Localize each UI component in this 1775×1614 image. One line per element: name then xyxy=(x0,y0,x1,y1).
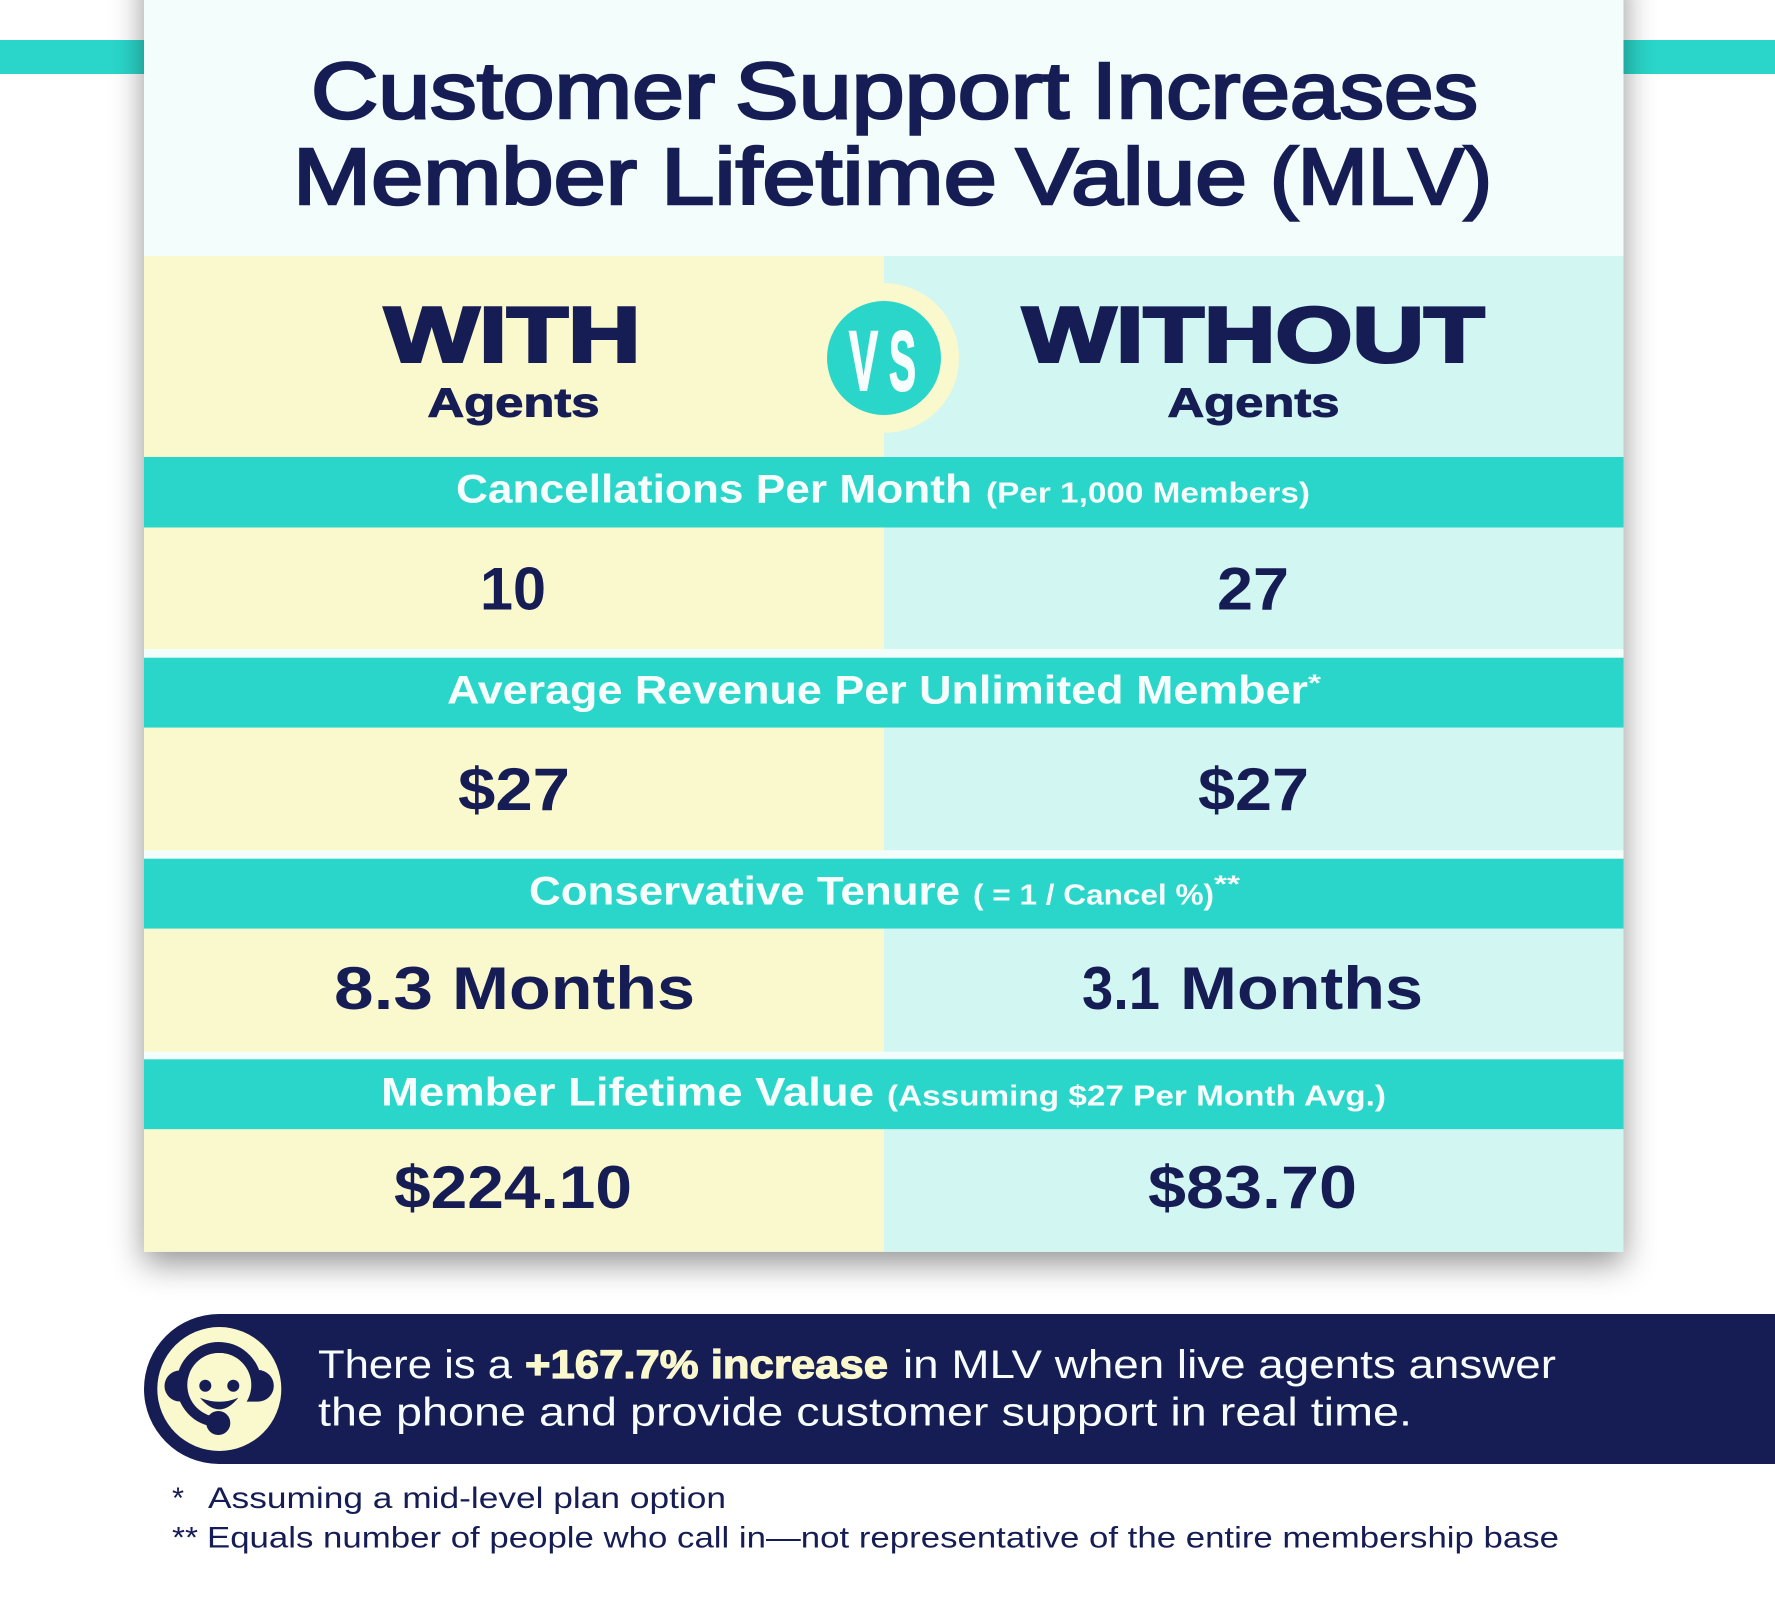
row: conservative tenure: Months xyxy=(452,955,695,1022)
footnotes: Assuming a mid-level plan option xyxy=(208,1482,726,1515)
footnotes xyxy=(172,1482,1559,1554)
footnotes: Equals number of people who call in—not representative of the entire membership base xyxy=(207,1522,1559,1554)
row: cancellations per month xyxy=(144,457,1624,649)
column heading: without agents: Agents xyxy=(1168,380,1340,426)
row: conservative tenure: ( = 1 / Cancel %) xyxy=(973,880,1214,912)
title block: Increases xyxy=(1092,46,1478,135)
title block: Member xyxy=(293,132,637,221)
row: cancellations per month: 10 xyxy=(480,556,546,622)
column heading: without agents: WITHOUT xyxy=(1022,290,1484,378)
decorative teal bar left xyxy=(0,40,150,74)
column heading: without agents xyxy=(884,256,1624,457)
VS badge: V xyxy=(849,314,878,408)
row: member lifetime value: $83.70 xyxy=(1148,1154,1357,1221)
decorative teal bar right xyxy=(1620,40,1775,74)
callout banner xyxy=(144,1314,1775,1464)
column heading: with agents: WITH xyxy=(384,290,640,378)
row: cancellations per month: (Per 1,000 Members) xyxy=(986,478,1310,510)
title block xyxy=(293,46,1492,221)
row: average revenue: $27 xyxy=(458,756,570,823)
title block: (MLV) xyxy=(1270,132,1492,221)
VS badge xyxy=(827,283,959,433)
callout text xyxy=(318,1343,1556,1434)
row: average revenue: * xyxy=(1308,670,1322,697)
VS badge: S xyxy=(889,314,916,408)
title block: Lifetime xyxy=(661,132,997,221)
title block: Value xyxy=(1016,132,1247,221)
row: average revenue: Average Revenue Per Unlimited Member xyxy=(447,668,1308,712)
row: conservative tenure: ** xyxy=(1214,871,1241,898)
footnotes: ** xyxy=(172,1522,198,1554)
callout text: There is a xyxy=(318,1343,513,1387)
callout text: +167.7% increase xyxy=(525,1343,888,1387)
footnotes: * xyxy=(172,1482,184,1515)
icon: support agent with headset xyxy=(157,1327,281,1451)
title block: Customer xyxy=(311,46,715,135)
row: member lifetime value xyxy=(144,1059,1624,1252)
row: cancellations per month: 27 xyxy=(1217,556,1289,622)
row: conservative tenure: Months xyxy=(1180,955,1423,1022)
panel: comparison table xyxy=(144,0,1624,1252)
callout text: in MLV when live agents answer xyxy=(903,1343,1556,1387)
row: conservative tenure: Conservative Tenure xyxy=(529,870,960,914)
title block: Support xyxy=(735,46,1069,135)
row: member lifetime value: (Assuming $27 Per Month Avg.) xyxy=(887,1080,1386,1112)
row: conservative tenure: 8.3 xyxy=(334,955,433,1022)
row: average revenue: $27 xyxy=(1198,756,1309,823)
row: average revenue xyxy=(144,658,1624,850)
row: cancellations per month: Cancellations Per Month xyxy=(456,468,972,512)
column heading: with agents: Agents xyxy=(428,380,600,426)
row: member lifetime value: Member Lifetime Value xyxy=(381,1070,874,1114)
row: conservative tenure xyxy=(144,859,1624,1052)
column heading: with agents xyxy=(144,256,884,457)
callout text: the phone and provide customer support in real time. xyxy=(318,1390,1412,1434)
row: conservative tenure: 3.1 xyxy=(1082,955,1160,1022)
row: member lifetime value: $224.10 xyxy=(394,1154,632,1221)
